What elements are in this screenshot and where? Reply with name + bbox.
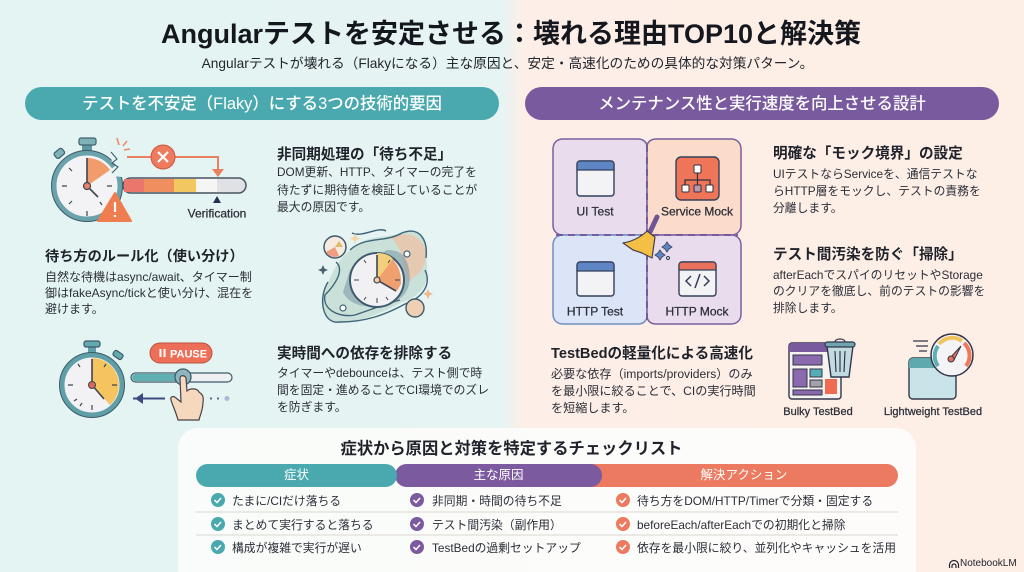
actions list bbox=[637, 494, 896, 555]
NotebookLM watermark: NotebookLM bbox=[960, 558, 1017, 569]
title: Angularテストを安定させる：壊れる理由TOP10と解決策 bbox=[161, 19, 861, 49]
actions list: 依存を最小限に絞り、並列化やキャッシュを活用 bbox=[637, 541, 896, 555]
text block: removing real-time dependence: タイマーやdebounceは、テスト側で時 bbox=[277, 366, 482, 380]
check icons: action column bbox=[616, 493, 630, 554]
text block: removing real-time dependence bbox=[277, 345, 489, 414]
text block: waiting rules: 自然な待機はasync/await、タイマー制 bbox=[45, 270, 252, 284]
icon: lightweight TestBed with gauge: Lightweight TestBed bbox=[884, 406, 982, 418]
causes list: 非同期・時間の待ち不足 bbox=[432, 494, 562, 508]
icon: bulky TestBed with trash can: Bulky TestBed bbox=[783, 406, 853, 418]
text block: preventing test pollution: のクリアを徹底し、前のテストの影響を bbox=[773, 284, 985, 298]
text block: removing real-time dependence: を防ぎます。 bbox=[277, 400, 347, 414]
actions list: beforeEach/afterEachでの初期化と掃除 bbox=[637, 518, 846, 532]
check icons: symptom column bbox=[211, 493, 225, 554]
actions list: 待ち方をDOM/HTTP/Timerで分類・固定する bbox=[637, 494, 873, 508]
icon: broken stopwatch with verification bar: Verification bbox=[188, 206, 246, 220]
text block: lightweight TestBed: を短縮します。 bbox=[551, 400, 634, 414]
column header: action: 解決アクション bbox=[701, 468, 787, 482]
icon: stopwatch with pause slider: PAUSE bbox=[170, 348, 207, 360]
icon: Service Mock hierarchy bbox=[676, 157, 719, 200]
text block: lightweight TestBed: TestBedの軽量化による高速化 bbox=[551, 346, 753, 362]
text block: removing real-time dependence: 実時間への依存を排除する bbox=[277, 346, 452, 362]
text block: waiting rules: 待ち方のルール化（使い分け） bbox=[45, 249, 244, 265]
causes list bbox=[432, 494, 581, 555]
text block: mock boundaries: 分離します。 bbox=[773, 200, 843, 214]
icon: HTTP Mock code window bbox=[679, 262, 716, 296]
icon: lightweight TestBed with gauge bbox=[884, 334, 982, 418]
icon: HTTP Test window bbox=[577, 262, 614, 296]
text block: lack of waiting: 最大の原因です。 bbox=[277, 200, 370, 214]
icon: bulky TestBed with trash can bbox=[783, 339, 855, 418]
text block: waiting rules: 御はfakeAsync/tickと使い分け、混在を bbox=[45, 286, 253, 300]
subtitle: Angularテストが壊れる（Flakyになる）主な原因と、安定・高速化のための具体的な対策パターン。 bbox=[202, 56, 813, 71]
text block: removing real-time dependence: 間を固定・進めることでCI環境でのズレ bbox=[277, 383, 489, 397]
diagram: mock boundary grid: Service Mock bbox=[661, 204, 734, 218]
text block: lightweight TestBed bbox=[551, 345, 756, 414]
icon: broken stopwatch with verification bar bbox=[52, 138, 246, 222]
text block: waiting rules: 避けます。 bbox=[45, 302, 104, 316]
text block: preventing test pollution bbox=[773, 246, 985, 315]
text block: preventing test pollution: afterEachでスパイのリセットやStorage bbox=[773, 268, 983, 282]
column header: symptom: 症状 bbox=[284, 468, 309, 482]
panel: checklist bbox=[178, 428, 916, 572]
text block: lightweight TestBed: 必要な依存（imports/providers）のみ bbox=[551, 366, 753, 380]
icon: melting clock bbox=[318, 230, 433, 322]
icon: stopwatch with pause slider bbox=[60, 341, 232, 420]
column header: cause: 主な原因 bbox=[473, 468, 524, 482]
diagram: mock boundary grid: UI Test bbox=[576, 204, 614, 218]
causes list: テスト間汚染（副作用） bbox=[432, 518, 562, 532]
symptoms list: たまに/CIだけ落ちる bbox=[232, 494, 341, 508]
section header: technical causes bbox=[25, 87, 499, 120]
causes list: TestBedの過剰セットアップ bbox=[432, 541, 581, 555]
column header: action bbox=[590, 464, 898, 487]
text block: mock boundaries: UIテストならServiceを、通信テストな bbox=[773, 166, 978, 180]
text block: mock boundaries: 明確な「モック境界」の設定 bbox=[773, 146, 963, 162]
icon: NotebookLM logo bbox=[950, 560, 958, 568]
symptoms list bbox=[232, 494, 374, 555]
diagram: mock boundary grid: HTTP Test bbox=[567, 304, 624, 318]
section header: maintainability design: メンテナンス性と実行速度を向上させる設計 bbox=[598, 95, 926, 113]
text block: mock boundaries bbox=[773, 145, 981, 214]
column header: cause bbox=[395, 464, 602, 487]
icon: broom bbox=[623, 217, 672, 260]
text block: preventing test pollution: 排除します。 bbox=[773, 301, 843, 315]
text block: lack of waiting: DOM更新、HTTP、タイマーの完了を bbox=[277, 165, 477, 179]
symptoms list: 構成が複雑で実行が遅い bbox=[232, 541, 362, 555]
symptoms list: まとめて実行すると落ちる bbox=[232, 518, 374, 532]
text block: lack of waiting bbox=[277, 146, 477, 214]
section header: maintainability design bbox=[525, 87, 999, 120]
diagram: mock boundary grid bbox=[553, 139, 741, 324]
text block: lack of waiting: 待たずに期待値を検証していることが bbox=[277, 182, 477, 196]
check icons: cause column bbox=[410, 493, 424, 554]
text block: mock boundaries: らHTTP層をモックし、テストの責務を bbox=[773, 184, 981, 198]
text block: lack of waiting: 非同期処理の「待ち不足」 bbox=[277, 147, 452, 163]
diagram: mock boundary grid: HTTP Mock bbox=[665, 304, 730, 318]
column header: symptom bbox=[196, 464, 397, 487]
row dividers bbox=[196, 512, 898, 535]
section header: technical causes: テストを不安定（Flaky）にする3つの技術的要因 bbox=[82, 95, 442, 113]
checklist title: 症状から原因と対策を特定するチェックリスト bbox=[341, 440, 682, 458]
text block: waiting rules bbox=[45, 248, 253, 316]
text block: preventing test pollution: テスト間汚染を防ぐ「掃除」 bbox=[773, 247, 963, 263]
icon: UI Test window bbox=[577, 161, 614, 196]
text block: lightweight TestBed: を最小限に絞ることで、CIの実行時間 bbox=[551, 384, 756, 398]
